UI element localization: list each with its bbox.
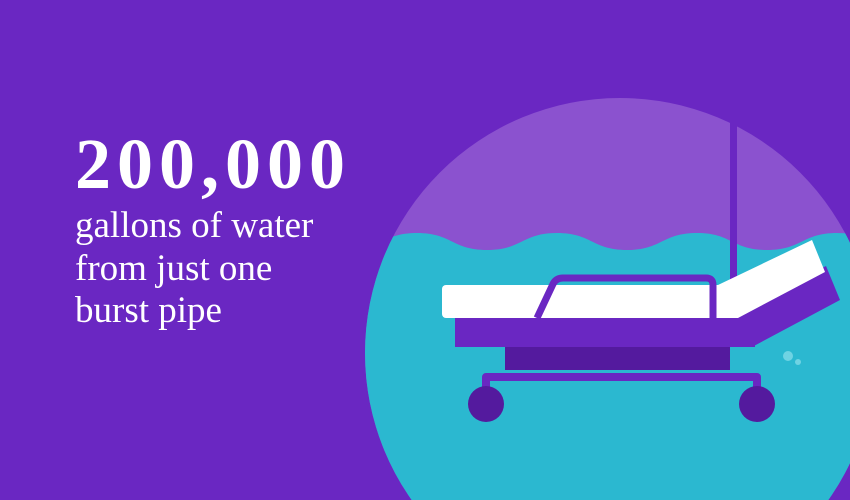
caption text: gallons of water xyxy=(75,205,313,246)
icon: IV pole xyxy=(730,120,737,280)
circle scene xyxy=(347,90,850,500)
caption text: burst pipe xyxy=(75,290,222,331)
icon: bubbles xyxy=(783,351,801,365)
headline number: 200,000 xyxy=(75,124,351,204)
water xyxy=(347,233,850,500)
caption text: from just one xyxy=(75,248,272,288)
icon: bed xyxy=(442,240,840,422)
illustration: flooded hospital bed xyxy=(365,98,850,500)
caption text xyxy=(75,205,313,331)
